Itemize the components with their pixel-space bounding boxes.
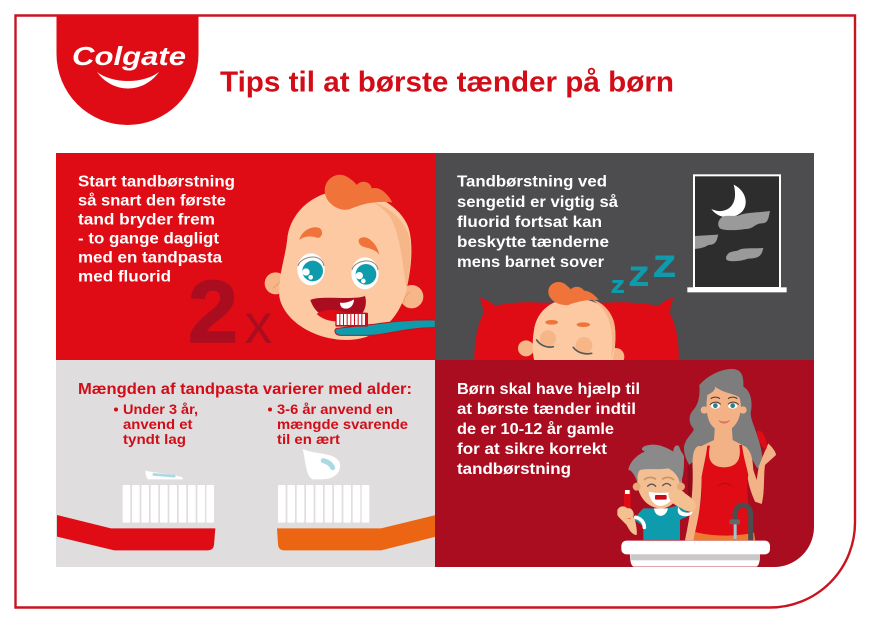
text block: help children: tandbørstning [457,461,571,478]
text block: start brushing: tand bryder frem [78,212,215,228]
icon: orange toothbrush with pea of paste [277,449,436,550]
logo: Colgate [56,15,198,125]
text block: bedtime: sengetid er vigtig så [457,193,618,211]
text block: bedtime [457,174,618,271]
text block: bedtime: Tandbørstning ved [457,174,607,190]
panel: help children [435,360,814,567]
text block: bedtime: fluorid fortsat kan [457,214,602,231]
icon: faucet [729,505,751,540]
panel: start brushing [56,153,435,361]
heading: toothpaste amount: Mængden af tandpasta varierer med alder: [78,381,412,398]
2x label: 2 [188,262,238,361]
icon: mother [684,369,776,540]
text block: start brushing: Start tandbørstning [78,174,235,190]
icon: zzz: Z [654,251,675,284]
text block: 3-6 years: mængde svarende [277,416,408,432]
text block: start brushing: så snart den første [78,192,226,210]
text block: under 3 years: anvend et [123,416,193,432]
icon: baby brushing teeth [265,175,435,340]
text block: 3-6 years: til en ært [277,431,340,447]
logo: Colgate: Colgate [72,41,186,71]
text block: under 3 years: Under 3 år, [123,401,198,417]
panel: bedtime brushing [435,153,814,365]
2x label: x [244,292,272,355]
2x label [188,262,272,361]
text block: help children: at børste tænder indtil [457,401,636,418]
text block: help children: Børn skal have hjælp til [457,381,640,398]
icon: boy brushing teeth [617,445,696,540]
text block: bedtime: beskytte tænderne [457,234,609,251]
icon: zzz: Z [629,262,648,292]
text block: start brushing: - to gange dagligt [78,230,220,248]
icon: night window [687,175,787,292]
text block: start brushing: med fluorid [78,268,171,286]
text block: help children: de er 10-12 år gamle [457,420,614,438]
icon: zzz [612,256,675,293]
icon: red toothbrush with thin paste [57,471,215,550]
icon: sleeping baby [474,282,679,365]
icon: sink [621,541,770,567]
text block: start brushing: med en tandpasta [78,250,222,266]
text block: bedtime: mens barnet sover [457,254,604,271]
panel: toothpaste amount [56,360,436,567]
text block: under 3 years [114,401,198,447]
title: Tips til at børste tænder på børn [220,66,674,98]
text block: under 3 years: tyndt lag [123,431,186,447]
text block: help children [457,381,640,478]
icon: zzz: Z [612,276,624,296]
text block: 3-6 years: 3-6 år anvend en [277,401,393,417]
text block: 3-6 years [268,401,408,447]
text block: start brushing [78,174,235,286]
text block: help children: for at sikre korrekt [457,441,608,458]
